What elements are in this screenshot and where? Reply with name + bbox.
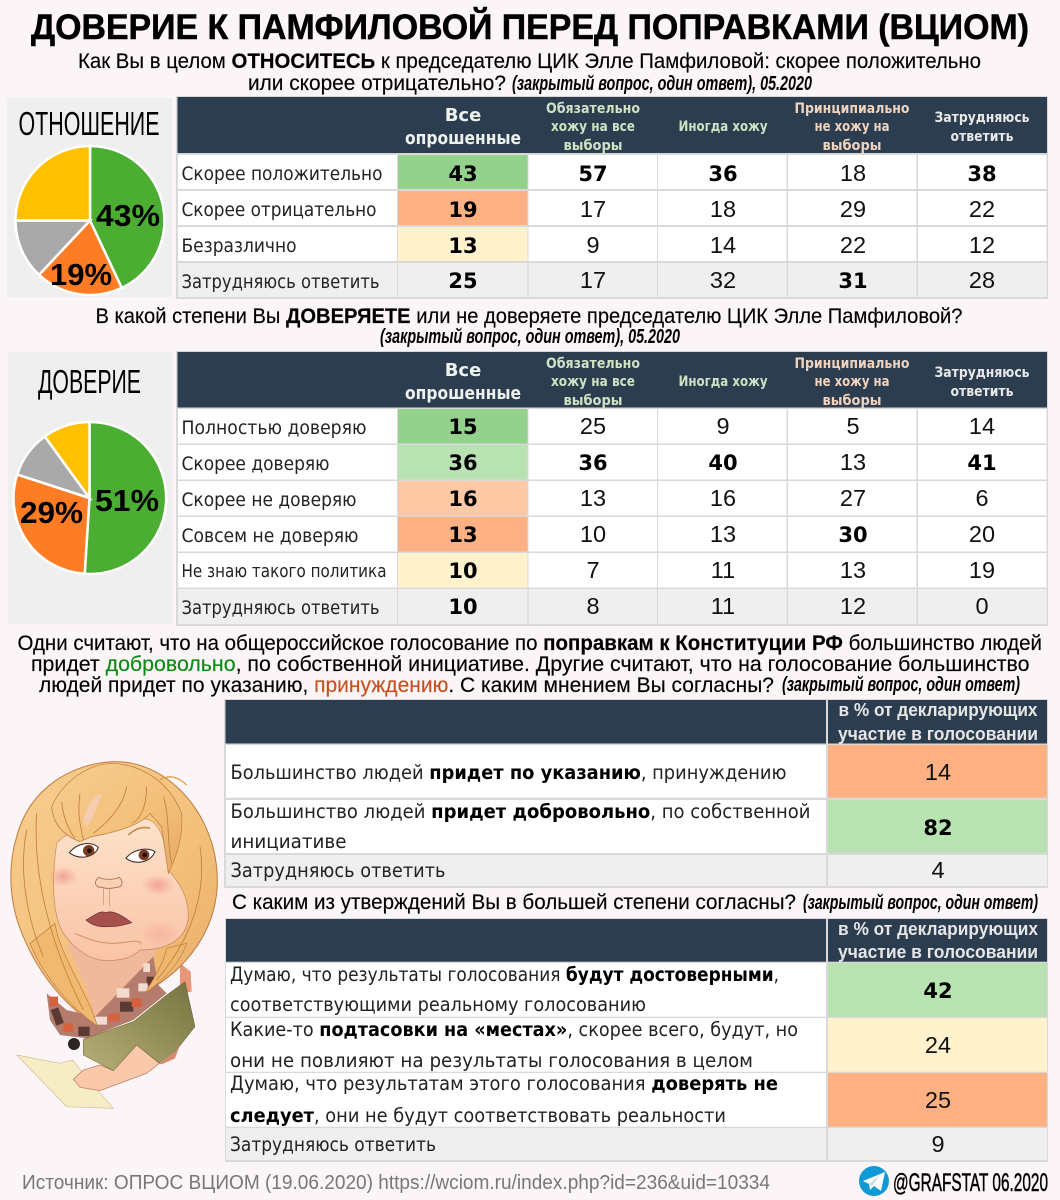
table: trust: 13	[840, 449, 866, 475]
question 2: В какой степени Вы ДОВЕРЯЕТЕ или не доверяете председателю ЦИК Элле Памфиловой?	[96, 304, 963, 328]
panel: trust pie: 51%	[95, 483, 159, 518]
table: trust: 5	[846, 413, 860, 439]
table: trust in results: следует, они не будут соответствовать реальности	[230, 1104, 726, 1127]
table: attitude: 43	[448, 162, 478, 186]
table: trust: 12	[840, 593, 866, 619]
question 3: Одни считают, что на общероссийское голосование по поправкам к Конституции РФ большинство людей	[18, 631, 1042, 655]
table: attitude: 32	[710, 267, 736, 293]
table: trust: 36	[578, 451, 608, 475]
table: trust: выборы	[822, 393, 882, 409]
table: attitude: Иногда хожу	[678, 119, 768, 135]
table: attitude: Затрудняюсь	[934, 110, 1030, 126]
icon: telegram	[859, 1166, 889, 1196]
table: trust in results: участие в голосовании	[838, 942, 1038, 962]
table: attitude: 38	[967, 162, 997, 186]
table: voluntary or coerced	[224, 699, 1048, 888]
table: trust: 10	[580, 521, 606, 547]
table: attitude: 18	[710, 196, 736, 222]
table: trust: 19	[969, 557, 995, 583]
table: trust: 30	[838, 523, 868, 547]
table: trust: Обязательно	[546, 356, 640, 372]
table: trust: 13	[580, 485, 606, 511]
question 1: или скорее отрицательно?	[248, 71, 506, 95]
table: trust: 40	[708, 451, 738, 475]
table: voluntary or coerced: участие в голосовании	[838, 724, 1038, 744]
table: attitude: 29	[840, 196, 866, 222]
table: trust in results: соответствующими реальному голосованию	[230, 993, 646, 1016]
table: attitude: 17	[580, 196, 606, 222]
table: trust in results: 42	[923, 979, 953, 1003]
panel: attitude pie: 19%	[50, 257, 112, 292]
table: voluntary or coerced: 82	[923, 816, 953, 840]
table: attitude: 18	[840, 160, 866, 186]
table: trust: не хожу на	[814, 374, 890, 390]
table: trust in results: 25	[925, 1087, 951, 1113]
table: attitude: 13	[448, 234, 478, 258]
table: attitude: 36	[708, 162, 738, 186]
table: trust in results: Затрудняюсь ответить	[230, 1133, 436, 1156]
panel: trust pie	[8, 352, 173, 624]
table: trust: 25	[580, 413, 606, 439]
table: trust: 16	[710, 485, 736, 511]
table: trust: 0	[975, 593, 989, 619]
table: trust: 10	[448, 595, 478, 619]
question 1: Как Вы в целом ОТНОСИТЕСЬ к председателю ЦИК Элле Памфиловой: скорее положительно	[78, 49, 981, 73]
question 3	[18, 631, 1042, 697]
table: attitude: выборы	[564, 138, 622, 154]
table: trust: 36	[448, 451, 478, 475]
title: ДОВЕРИЕ К ПАМФИЛОВОЙ ПЕРЕД ПОПРАВКАМИ (ВЦИОМ)	[31, 7, 1029, 47]
question 1	[78, 49, 981, 95]
table: trust: 16	[448, 487, 478, 511]
table: attitude: 19	[448, 198, 478, 222]
table: trust: 27	[840, 485, 866, 511]
table: trust: Совсем не доверяю	[182, 526, 358, 547]
panel: attitude pie	[7, 98, 172, 297]
table: trust: опрошенные	[405, 383, 521, 404]
table: trust: 11	[711, 557, 735, 583]
table: attitude: хожу на все	[551, 119, 635, 135]
table: attitude: 25	[448, 269, 478, 293]
table: trust: 20	[969, 521, 995, 547]
table: attitude: Скорее отрицательно	[182, 200, 376, 221]
question 4: С каким из утверждений Вы в большей степени согласны?	[232, 890, 796, 914]
table: trust: 8	[586, 593, 600, 619]
table: trust: 13	[448, 523, 478, 547]
table: attitude: выборы	[822, 138, 882, 154]
question 1: (закрытый вопрос, один ответ), 05.2020	[512, 73, 812, 95]
table: trust: Затрудняюсь ответить	[182, 598, 380, 619]
question 3: людей придет по указанию, принуждению. С каким мнением Вы согласны?	[39, 673, 774, 697]
panel: trust pie: ДОВЕРИЕ	[38, 363, 141, 400]
table: trust in results: Какие-то подтасовки на «местах», скорее всего, будут, но	[230, 1018, 798, 1041]
table: attitude: 28	[969, 267, 995, 293]
panel: attitude pie: ОТНОШЕНИЕ	[18, 105, 160, 142]
table: voluntary or coerced: Большинство людей придет добровольно, по собственной	[230, 800, 810, 823]
table: voluntary or coerced: инициативе	[230, 830, 346, 853]
table: attitude: 17	[580, 267, 606, 293]
table: trust: Полностью доверяю	[182, 418, 366, 439]
table: attitude: 14	[710, 232, 736, 258]
table: trust in results: в % от декларирующих	[838, 919, 1038, 939]
table: trust: 13	[710, 521, 736, 547]
table: trust in results: Думаю, что результатам этого голосования доверять не	[230, 1072, 778, 1095]
table: attitude: 31	[838, 269, 868, 293]
table: trust: Скорее не доверяю	[182, 490, 356, 511]
table: attitude: 9	[586, 232, 600, 258]
table: trust: Принципиально	[794, 356, 910, 372]
table: trust: 15	[448, 415, 478, 439]
table: trust	[176, 351, 1048, 626]
table: voluntary or coerced: Затрудняюсь ответить	[230, 859, 446, 882]
table: attitude: Принципиально	[794, 101, 910, 117]
table: trust in results: они не повлияют на результаты голосования в целом	[230, 1049, 753, 1072]
table: voluntary or coerced: 4	[931, 857, 945, 883]
table: attitude: ответить	[950, 129, 1014, 145]
table: attitude: 12	[969, 232, 995, 258]
question 3: придет добровольно, по собственной инициативе. Другие считают, что на голосование большинство	[31, 652, 1030, 676]
table: trust: 13	[840, 557, 866, 583]
table: trust: Иногда хожу	[678, 374, 768, 390]
table: attitude: Скорее положительно	[182, 164, 382, 185]
table: trust: 7	[586, 557, 600, 583]
illustration: caricature portrait	[11, 762, 217, 1108]
table: attitude: опрошенные	[405, 128, 521, 149]
table: trust: 9	[716, 413, 730, 439]
table: trust: ответить	[950, 384, 1014, 400]
table: attitude: 22	[969, 196, 995, 222]
table: trust in results: Думаю, что результаты голосования будут достоверными,	[230, 963, 779, 986]
table: attitude: 57	[578, 162, 608, 186]
table: attitude: не хожу на	[814, 119, 890, 135]
question 2: (закрытый вопрос, один ответ), 05.2020	[380, 326, 680, 348]
table: trust: Скорее доверяю	[182, 454, 330, 475]
table: voluntary or coerced: 14	[925, 759, 951, 785]
table: trust: Все	[445, 360, 481, 381]
table: attitude: Безразлично	[182, 236, 296, 257]
source line: Источник: ОПРОС ВЦИОМ (19.06.2020) https://wciom.ru/index.php?id=236&uid=10334	[22, 1172, 770, 1194]
table: attitude: Обязательно	[546, 101, 640, 117]
panel: trust pie: 29%	[20, 495, 83, 530]
table: attitude: Все	[445, 105, 481, 126]
table: attitude: 22	[840, 232, 866, 258]
table: trust: 11	[711, 593, 735, 619]
table: attitude: Затрудняюсь ответить	[182, 272, 380, 293]
table: trust: выборы	[564, 393, 622, 409]
table: trust: хожу на все	[551, 374, 635, 390]
table: trust: 10	[448, 559, 478, 583]
table: trust: Не знаю такого политика	[182, 561, 386, 582]
table: voluntary or coerced: в % от декларирующих	[838, 700, 1038, 720]
table: trust in results: 24	[925, 1032, 951, 1058]
table: trust: 41	[967, 451, 997, 475]
table: trust: 14	[969, 413, 995, 439]
table: trust: 6	[975, 485, 989, 511]
table: voluntary or coerced: Большинство людей придет по указанию, принуждению	[230, 761, 786, 784]
question 2	[96, 304, 963, 348]
table: trust: Затрудняюсь	[934, 365, 1030, 381]
table: trust in results: 9	[931, 1131, 945, 1157]
panel: attitude pie: 43%	[96, 198, 160, 233]
table: trust in results	[225, 918, 1048, 1162]
table: attitude	[176, 96, 1048, 299]
